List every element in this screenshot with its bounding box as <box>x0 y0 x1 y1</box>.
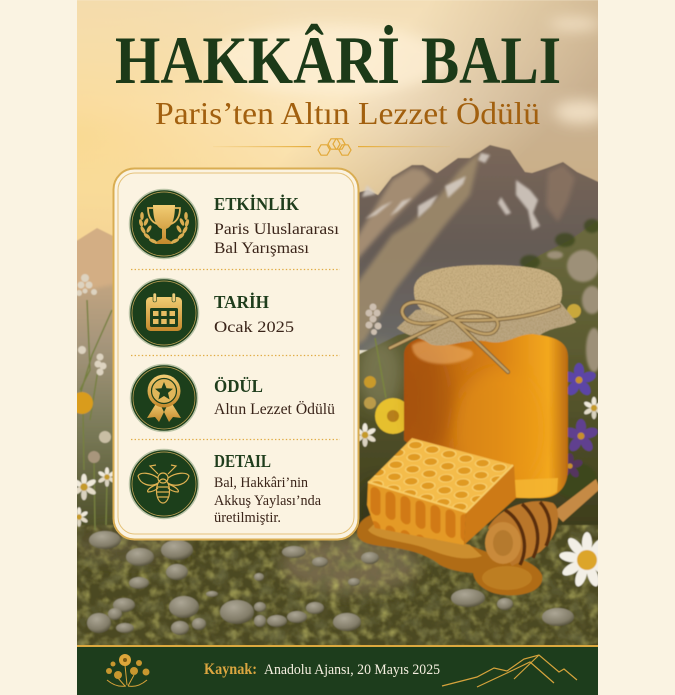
honey jar <box>390 265 576 498</box>
detail text: Bal, Hakkâri’nin <box>214 475 308 491</box>
icon: medal <box>130 364 198 432</box>
title: HAKKÂRİ <box>115 22 400 98</box>
icon: footer flowers <box>106 654 150 686</box>
subtitle: Paris’ten Altın Lezzet Ödülü <box>155 95 540 131</box>
daisy <box>558 531 598 588</box>
detail row <box>130 450 321 526</box>
title: BALI <box>421 22 561 98</box>
detail text: üretilmiştir. <box>214 510 281 526</box>
source label: Kaynak: <box>204 661 257 678</box>
date row <box>130 278 294 348</box>
event heading: ETKİNLİK <box>214 194 299 214</box>
date heading: TARİH <box>214 292 269 312</box>
poster scene background <box>60 0 615 650</box>
icon: mountain outline <box>442 655 577 687</box>
event row <box>130 190 340 258</box>
event text <box>214 221 340 257</box>
honey puddle <box>357 512 542 595</box>
event text: Paris Uluslararası <box>214 221 340 238</box>
detail text: Akkuş Yaylası’nda <box>214 493 321 509</box>
honeycomb divider <box>213 139 450 155</box>
date text: Ocak 2025 <box>214 319 294 336</box>
source text: Anadolu Ajansı, 20 Mayıs 2025 <box>264 662 440 678</box>
info panel <box>114 168 358 540</box>
icon: calendar <box>130 278 198 348</box>
footer bar <box>77 645 598 695</box>
wildflowers right <box>353 304 605 479</box>
twine bow <box>390 302 559 372</box>
award heading: ÖDÜL <box>214 376 263 396</box>
rocky moss ground <box>70 525 605 650</box>
burlap lid cloth <box>397 302 576 346</box>
distant mountains <box>70 145 605 350</box>
infographic poster <box>77 0 598 695</box>
honey dipper <box>485 479 600 566</box>
award text: Altın Lezzet Ödülü <box>214 400 335 418</box>
icon: trophy <box>130 190 198 258</box>
icon: bee <box>130 450 198 518</box>
event text: Bal Yarışması <box>214 240 310 257</box>
detail text <box>214 475 321 526</box>
award row <box>130 364 335 432</box>
detail heading: DETAIL <box>214 451 271 471</box>
alpine meadow <box>60 215 605 560</box>
burlap lid top <box>414 265 562 320</box>
honeycomb <box>367 438 516 545</box>
wildflowers left <box>77 274 112 529</box>
